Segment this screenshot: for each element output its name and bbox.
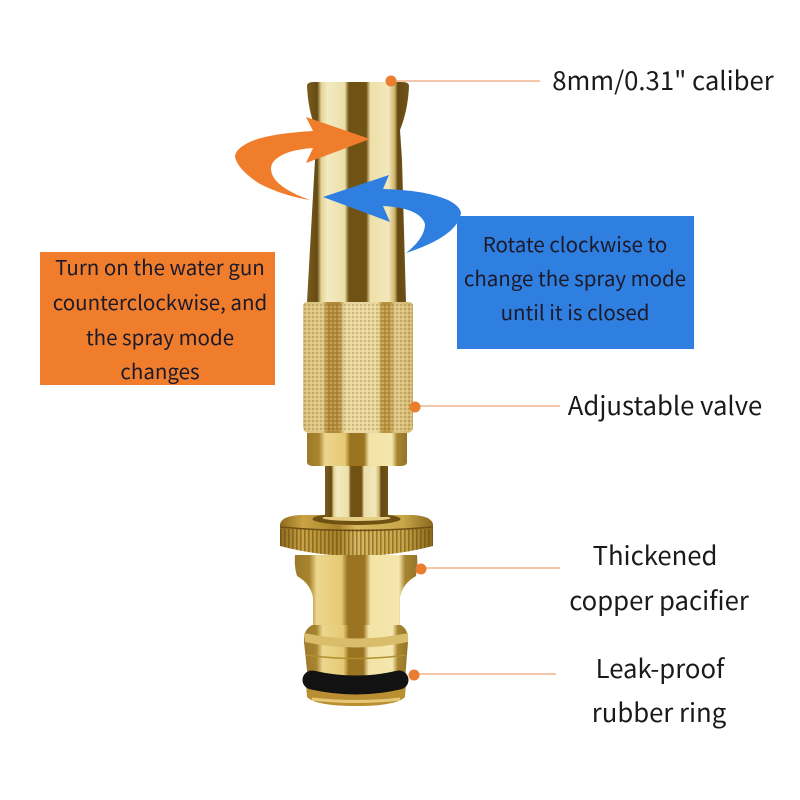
connector tip: [306, 684, 406, 706]
callout: leak-proof rubber ring: [408, 649, 727, 730]
quick connect collar: [304, 625, 408, 680]
callout: thickened copper pacifier: copper pacifier: [569, 581, 749, 618]
blue instruction box: Rotate clockwise to: [483, 228, 667, 258]
orange instruction box: counterclockwise, and: [53, 286, 267, 316]
callout: thickened copper pacifier: Thickened: [593, 536, 717, 573]
orange instruction box: the spray mode: [86, 321, 234, 351]
callout: adjustable valve: [410, 386, 762, 423]
callout: leak-proof rubber ring: Leak-proof: [596, 649, 726, 686]
callout: thickened copper pacifier: [416, 536, 749, 618]
nozzle barrel: [307, 82, 409, 302]
orange instruction box: changes: [120, 355, 200, 385]
knurled nut: [280, 515, 433, 556]
blue instruction box: [457, 216, 694, 349]
callout: caliber: 8mm/0.31" caliber: [552, 61, 774, 98]
callout: caliber: [386, 61, 774, 98]
knurled adjustable collar: [303, 302, 413, 433]
rubber ring: [312, 680, 399, 685]
blue rotation arrow: [323, 175, 461, 253]
lower hex section: [307, 433, 407, 466]
nozzle product illustration: [280, 82, 433, 706]
connector body: [295, 555, 417, 626]
blue instruction box: change the spray mode: [464, 262, 686, 292]
collar rim band: [304, 633, 408, 648]
orange rotation arrow: [235, 117, 370, 200]
orange instruction box: Turn on the water gun: [55, 251, 265, 281]
blue instruction box: until it is closed: [501, 296, 649, 326]
callout: adjustable valve: Adjustable valve: [568, 386, 762, 423]
flange: [312, 500, 400, 525]
connecting neck: [325, 466, 388, 516]
orange instruction box: [40, 251, 275, 385]
callout: leak-proof rubber ring: rubber ring: [592, 693, 727, 730]
